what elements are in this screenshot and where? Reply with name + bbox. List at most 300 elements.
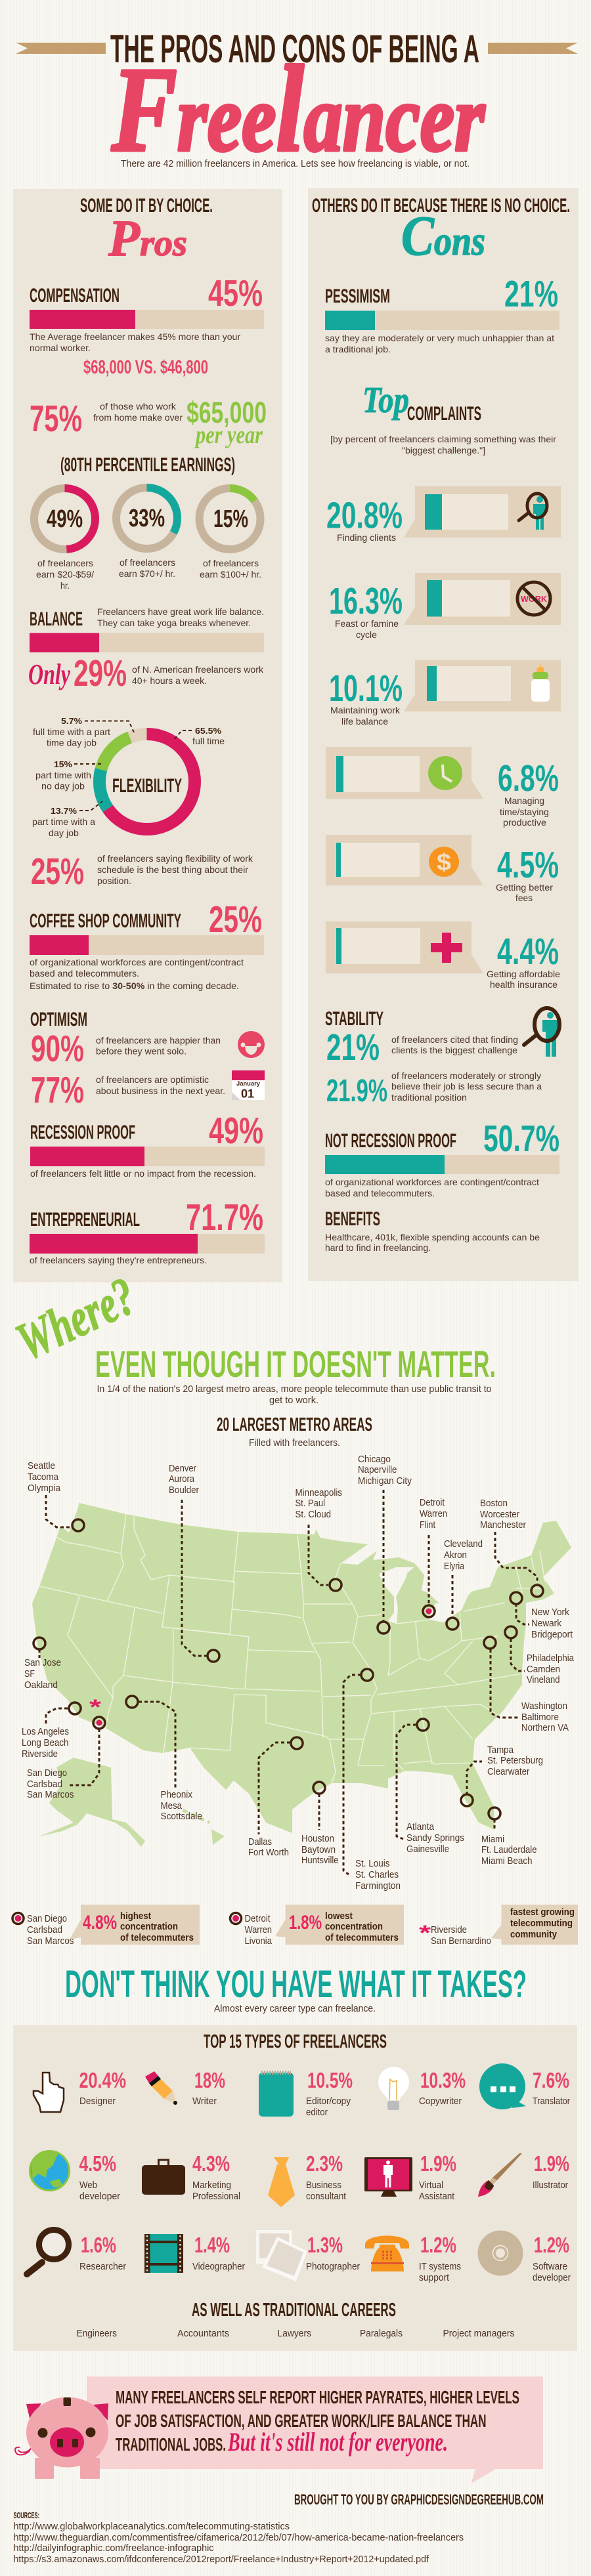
legend: highest concentration [12,1905,200,1947]
IT systems support: support [419,2272,450,2283]
complaint: better fees: 4.5% [497,844,559,886]
coffee shop community: of organizational workforces are contingent/contract [30,957,244,967]
section intro: In 1/4 of the nation's 20 largest metro areas, more people telecommute than use public transit to [97,1383,491,1395]
optimism: 77% [31,1069,84,1111]
city labels: Tacoma [28,1471,59,1483]
designer [33,2068,126,2112]
legend: fastest growing: San Bernardino [431,1935,491,1947]
top complaints heading: COMPLAINTS [407,403,481,425]
city labels: Tampa [487,1744,514,1756]
legend: lowest concentration: 1.8% [289,1912,322,1933]
complaint: managing time: time/staying [500,807,549,817]
complaint: health insurance: 4.4% [497,931,559,973]
copywriter: 10.3% [420,2068,466,2092]
editor: 10.5% [307,2068,353,2092]
75 percent stat: per year [194,421,263,449]
photographer [256,2230,360,2281]
map: Alaska [39,1758,145,1847]
pessimism: say they are moderately or very much unhappier than at [325,333,554,343]
cons script: Cons [401,204,485,267]
city labels: Northern VA [521,1722,569,1733]
25 percent flexibility stat [31,851,253,893]
sources: SOURCES: [13,2510,39,2520]
benefits: Healthcare, 401k, flexible spending accounts can be [325,1232,540,1242]
city labels: Detroit [420,1497,445,1508]
business consultant [268,2151,347,2207]
recession proof [30,1110,265,1179]
city labels: San Jose [24,1657,61,1668]
stability: believe their job is less secure than a [391,1081,542,1091]
marketing professional: Professional [192,2191,240,2202]
75 percent stat: from home make over [93,412,183,423]
videographer [144,2233,245,2273]
city labels: Camden [527,1664,560,1675]
complaint: health insurance: health insurance [490,979,558,990]
pessimism: PESSIMISM [325,285,390,307]
not recession proof: based and telecommuters. [325,1188,435,1198]
pessimism: a traditional job. [325,344,391,354]
flexibility chart: 5.7% [61,716,82,726]
donut 33 percent: earn $70+/ hr. [119,568,175,579]
complaint: feast or famine [329,573,561,640]
city labels: St. Cloud [296,1509,331,1520]
not recession proof: of organizational workforces are contingent/contract [325,1177,539,1187]
legend: fastest growing: * [419,1921,431,1945]
donut 15 percent [200,488,261,580]
marketing professional: 4.3% [192,2151,230,2176]
flexibility chart: 13.7% [51,806,77,816]
pros heading: SOME DO IT BY CHOICE. [80,195,213,217]
photographer: 1.3% [307,2233,343,2257]
section intro [97,1383,491,1406]
city labels: Vineland [527,1674,559,1685]
map: contiguous US [32,1503,571,1833]
compensation [30,272,264,378]
sources: https://s3.amazonaws.com/ifdconference/2012report/Freelance+Industry+Report+2012+updated.pdf [13,2554,429,2565]
flexibility chart [32,716,225,838]
panel heading: TOP 15 TYPES OF FREELANCERS [204,2031,387,2052]
stability: of freelancers moderately or strongly [391,1070,541,1081]
legend: lowest concentration: lowest [325,1911,353,1922]
city labels: Carlsbad [27,1779,62,1790]
donut 15 percent: earn $100+/ hr. [200,569,261,580]
optimism: of freelancers are optimistic [96,1074,209,1085]
optimism: before they went solo. [96,1046,186,1057]
where heading [7,1265,496,1448]
coffee shop community [30,898,264,991]
balance: of N. American freelancers work [132,664,264,675]
title script: Freelancer: Freelancer [111,40,485,177]
legend: lowest concentration: Livonia [244,1935,273,1947]
donut 15 percent: of freelancers [203,558,259,568]
complaint: work life balance: Maintaining work [330,705,401,715]
legend: highest concentration: Carlsbad [27,1924,62,1935]
legend: highest concentration: of telecommuters [120,1932,194,1943]
careers heading: Almost every career type can freelance. [214,2003,376,2014]
city labels: Huntsville [301,1855,339,1866]
coffee shop community: Estimated to rise to 30-50% in the coming decade. [30,981,239,991]
compensation: The Average freelancer makes 45% more than your [30,331,240,342]
panel: cons [308,188,579,1281]
city labels: Los Angeles [22,1726,69,1737]
writer [145,2068,225,2107]
legend: lowest concentration [230,1905,404,1947]
25 percent flexibility stat: 25% [31,851,84,893]
city labels: Boston [480,1498,508,1509]
city labels: Cleveland [444,1538,483,1550]
callout: speech bubble [87,2376,543,2483]
illustrator: 1.9% [534,2151,569,2176]
city labels: Scottsdale [160,1811,202,1822]
researcher [27,2230,126,2274]
balance [28,606,264,694]
25 percent flexibility stat: schedule is the best thing about their [97,864,248,875]
editor [259,2068,353,2118]
traditional careers: Lawyers [277,2328,311,2339]
75 percent stat: 75% [30,398,82,440]
city labels: Seattle [28,1460,55,1471]
city labels: Washington [521,1700,567,1712]
city labels: Atlanta [406,1821,435,1832]
recession proof: RECESSION PROOF [30,1122,135,1143]
icon: dollar coin: $ [437,849,451,876]
virtual assistant: 1.9% [420,2151,456,2176]
city labels: Elyria [444,1561,465,1572]
city labels: Fort Worth [248,1847,289,1858]
legend: highest concentration: San Marcos [27,1935,74,1947]
balance: BALANCE [30,608,83,630]
city labels: Houston [301,1833,334,1844]
stability: traditional position [391,1092,467,1103]
flexibility chart: 65.5% [195,726,221,736]
videographer: Videographer [192,2261,245,2272]
city labels: Warren [420,1508,447,1519]
legend: fastest growing [419,1905,578,1947]
stability: 21.9% [326,1074,387,1109]
entrepreneurial: 71.7% [186,1196,263,1238]
city labels: Worcester [480,1509,519,1520]
designer: 20.4% [79,2068,126,2092]
complaint: better fees: Getting better [496,882,553,893]
complaint: managing time: productive [503,817,546,828]
icon: calendar [232,1070,265,1100]
city labels: SF [24,1668,35,1679]
25 percent flexibility stat: position. [97,876,131,886]
entrepreneurial: of freelancers saying they're entrepreneurs. [30,1255,207,1265]
icon: no work [517,582,550,615]
optimism [30,1009,265,1111]
complaint: work life balance [329,660,561,727]
donut 33 percent: 33% [129,505,165,532]
section intro: get to work. [269,1395,318,1406]
sources: http://dailyinfographic.com/freelance-infographic [13,2543,214,2554]
web developer: developer [79,2191,120,2202]
city labels: St. Petersburg [487,1755,543,1766]
business consultant: 2.3% [306,2151,343,2176]
city labels: Michigan City [358,1475,412,1487]
legend: highest concentration: highest [120,1911,151,1922]
city labels: Mesa [160,1800,183,1811]
city labels: Flint [420,1519,436,1531]
pessimism [325,273,559,354]
complaint: feast or famine: cycle [356,629,377,640]
top complaints heading [330,380,556,455]
city labels: Clearwater [487,1766,529,1777]
virtual assistant: Virtual [419,2180,443,2191]
city labels: Philadelphia [527,1653,575,1664]
translator [479,2063,570,2109]
traditional careers: Paralegals [360,2328,403,2339]
metro heading: 20 LARGEST METRO AREAS [217,1414,372,1435]
IT systems support [365,2233,461,2283]
city labels [22,1454,575,1891]
complaint: work life balance: life balance [341,716,388,727]
city labels: Olympia [28,1483,61,1494]
city labels: Oakland [24,1679,58,1691]
traditional careers: Engineers [76,2328,117,2339]
route lines [39,1490,537,1874]
traditional careers: AS WELL AS TRADITIONAL CAREERS [192,2300,396,2321]
flexibility chart: time day job [47,738,97,748]
icon: magnifier and person [519,494,547,530]
complaint: managing time: Managing [504,795,544,806]
legend: highest concentration: San Diego [27,1913,67,1924]
city labels: Akron [444,1550,467,1561]
virtual assistant [364,2151,456,2202]
compensation: $68,000 VS. $46,800 [83,357,208,378]
city labels: Chicago [358,1454,391,1465]
compensation: COMPENSATION [30,285,120,306]
map legend [12,1905,578,1947]
virtual assistant: Assistant [419,2191,455,2202]
pessimism: 21% [504,273,558,315]
balance: Only [28,658,70,690]
city labels: Denver [169,1463,196,1474]
city labels: Long Beach [22,1737,68,1748]
complaint: finding clients: Finding clients [337,532,396,543]
coffee shop community: based and telecommuters. [30,968,139,979]
benefits: BENEFITS [325,1208,380,1230]
compensation: normal worker. [30,343,91,353]
panel: pros [13,189,282,1282]
illustrator: Illustrator [533,2180,568,2191]
balance: Freelancers have great work life balance. [97,606,264,617]
donut 49 percent: hr. [60,580,70,591]
translator: Translator [533,2096,570,2107]
coffee shop community: 25% [209,898,262,940]
traditional careers: Accountants [177,2328,229,2339]
percentile heading: (80TH PERCENTILE EARNINGS) [60,454,235,476]
flexibility chart: full time [192,736,225,746]
entrepreneurial [30,1196,265,1265]
traditional careers: Project managers [443,2328,515,2339]
marketing professional: Marketing [192,2180,231,2191]
complaint: finding clients [326,486,561,543]
city labels: Miami Beach [481,1855,532,1867]
city labels: Newark [531,1618,561,1629]
icon: magnifier and person [524,1008,559,1057]
legend: highest concentration: concentration [120,1921,178,1932]
75 percent stat [30,396,267,449]
stability: 21% [326,1026,380,1068]
benefits: hard to find in freelancing. [325,1242,431,1253]
not recession proof [325,1118,559,1198]
web developer [30,2151,120,2202]
coffee shop community: COFFEE SHOP COMMUNITY [30,910,181,932]
icon: clock [428,756,462,790]
city labels: St. Charles [355,1869,399,1880]
top complaints heading: "biggest challenge."] [402,445,485,455]
benefits [325,1208,540,1253]
map: Hawaii [183,1810,225,1845]
ribbon right [488,43,578,54]
icon: calendar: January [236,1080,260,1087]
donut 33 percent [116,488,177,579]
flexibility chart: day job [49,828,79,838]
75 percent stat: $65,000 [186,396,267,429]
icon: smiley [238,1031,265,1058]
city labels: Boulder [169,1485,199,1496]
software developer [478,2230,571,2283]
complaint: work life balance: 10.1% [329,667,403,709]
optimism: of freelancers are happier than [96,1035,221,1045]
complaint: better fees [326,835,559,903]
copywriter [378,2067,466,2110]
legend: fastest growing: Riverside [431,1924,467,1935]
city labels: Aurora [169,1473,195,1485]
web developer: 4.5% [79,2151,116,2176]
header [16,27,578,177]
writer: 18% [194,2068,225,2092]
city labels: Dallas [248,1836,272,1848]
copywriter: Copywriter [419,2096,462,2107]
city labels: Manchester [480,1519,526,1531]
marketing professional [142,2151,240,2202]
top complaints heading: [by percent of freelancers claiming something was their [330,434,556,444]
traditional careers [76,2300,515,2339]
flexibility chart: no day job [41,781,85,792]
not recession proof: 50.7% [483,1118,559,1160]
icon: baby bottle [531,664,550,702]
recession proof: 49% [209,1110,263,1152]
researcher: 1.6% [81,2233,116,2257]
recession proof: of freelancers felt little or no impact from the recession. [30,1168,256,1179]
writer: Writer [192,2096,217,2107]
flexibility chart: 15% [54,759,72,769]
flexibility chart: part time with a [32,816,95,827]
legend: lowest concentration: concentration [325,1921,383,1932]
balance: 40+ hours a week. [132,675,207,686]
balance: They can take yoga breaks whenever. [97,618,251,628]
panel: top 15 freelancers [13,2025,577,2351]
city labels: Gainesville [406,1844,449,1855]
sources: http://www.theguardian.com/commentisfree/cifamerica/2012/feb/07/how-america-became-nation-freelancers [13,2532,464,2543]
stability: STABILITY [325,1008,383,1030]
city labels: St. Paul [296,1498,325,1509]
city labels: San Marcos [27,1789,74,1800]
compensation: 45% [208,272,263,314]
software developer: 1.2% [534,2233,569,2257]
stability: of freelancers cited that finding [391,1034,518,1045]
25 percent flexibility stat: of freelancers saying flexibility of work [97,853,253,864]
legend: fastest growing: telecommuting [510,1918,573,1929]
stability [325,1008,559,1109]
top complaints heading: Top [362,380,409,421]
city labels: Farmington [355,1880,401,1891]
city labels: Ft. Lauderdale [481,1844,537,1855]
balance: 29% [74,652,127,694]
complaint: feast or famine: 16.3% [329,580,403,622]
complaint: managing time [326,747,559,828]
city labels: Naperville [358,1464,397,1475]
city markers [33,1519,543,1819]
icon: no work: WORK [521,594,548,604]
illustrator [478,2151,569,2197]
editor: editor [306,2107,328,2118]
donut 49 percent: 49% [47,505,83,533]
legend: fastest growing: fastest growing [510,1907,575,1918]
sources: http://www.globalworkplaceanalytics.com/telecommuting-statistics [13,2521,290,2532]
complaint: health insurance: Getting affordable [487,969,560,979]
asterisk: Riverside: * [89,1695,102,1719]
IT systems support: 1.2% [420,2233,456,2257]
business consultant: consultant [306,2191,347,2202]
callout: speech bubble: TRADITIONAL JOBS. [116,2434,226,2455]
donut 49 percent: earn $20-$59/ [36,569,94,580]
donut 15 percent: 15% [213,505,248,533]
pros script: Pros [108,209,187,266]
software developer: Software [533,2261,567,2272]
metro subheading: Filled with freelancers. [249,1437,340,1448]
subtitle: There are 42 million freelancers in America. Lets see how freelancing is viable, or not. [121,158,470,169]
legend: lowest concentration: Detroit [244,1913,271,1924]
city labels: Baltimore [521,1712,559,1723]
ribbon left [16,43,106,54]
icon: piggy bank [15,2397,108,2479]
legend: fastest growing: community [510,1929,558,1940]
legend: lowest concentration: of telecommuters [325,1932,399,1943]
city labels: New York [531,1607,569,1618]
IT systems support: IT systems [419,2261,461,2272]
donut 49 percent [34,488,95,591]
donut 49 percent: of freelancers [37,558,93,568]
web developer: Web [79,2180,97,2191]
complaint: better fees: fees [515,893,533,903]
legend: highest concentration: 4.8% [83,1912,117,1933]
city labels: Baytown [301,1844,336,1855]
where script: Where? [7,1265,144,1372]
stability: clients is the biggest challenge [391,1045,517,1055]
complaint: feast or famine: Feast or famine [335,618,399,629]
not recession proof: NOT RECESSION PROOF [325,1130,456,1152]
business consultant: Business [306,2180,341,2191]
donut 33 percent: of freelancers [120,557,175,568]
flexibility chart: FLEXIBILITY [112,775,182,797]
videographer: 1.4% [194,2233,230,2257]
city labels: Riverside [22,1748,58,1760]
city labels: San Diego [27,1767,67,1779]
map of metro areas [22,1454,575,1891]
complaint: health insurance [326,921,560,990]
city labels: Minneapolis [296,1487,342,1498]
city labels: Bridgeport [531,1629,573,1640]
complaint: finding clients: 20.8% [326,495,403,537]
researcher: Researcher [79,2261,126,2272]
software developer: developer [533,2272,571,2283]
legend: lowest concentration: Warren [244,1924,272,1935]
city labels: St. Louis [355,1858,390,1869]
flexibility chart: full time with a part [33,727,110,737]
